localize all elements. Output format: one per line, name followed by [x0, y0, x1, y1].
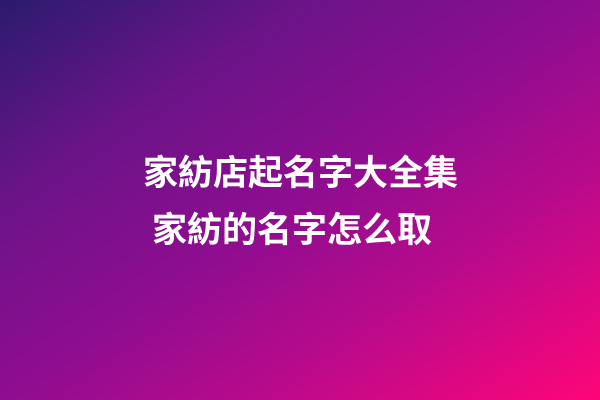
title line 2: 家紡的名字怎么取 — [152, 211, 432, 250]
title line 1: 家紡店起名字大全集 — [143, 154, 458, 193]
